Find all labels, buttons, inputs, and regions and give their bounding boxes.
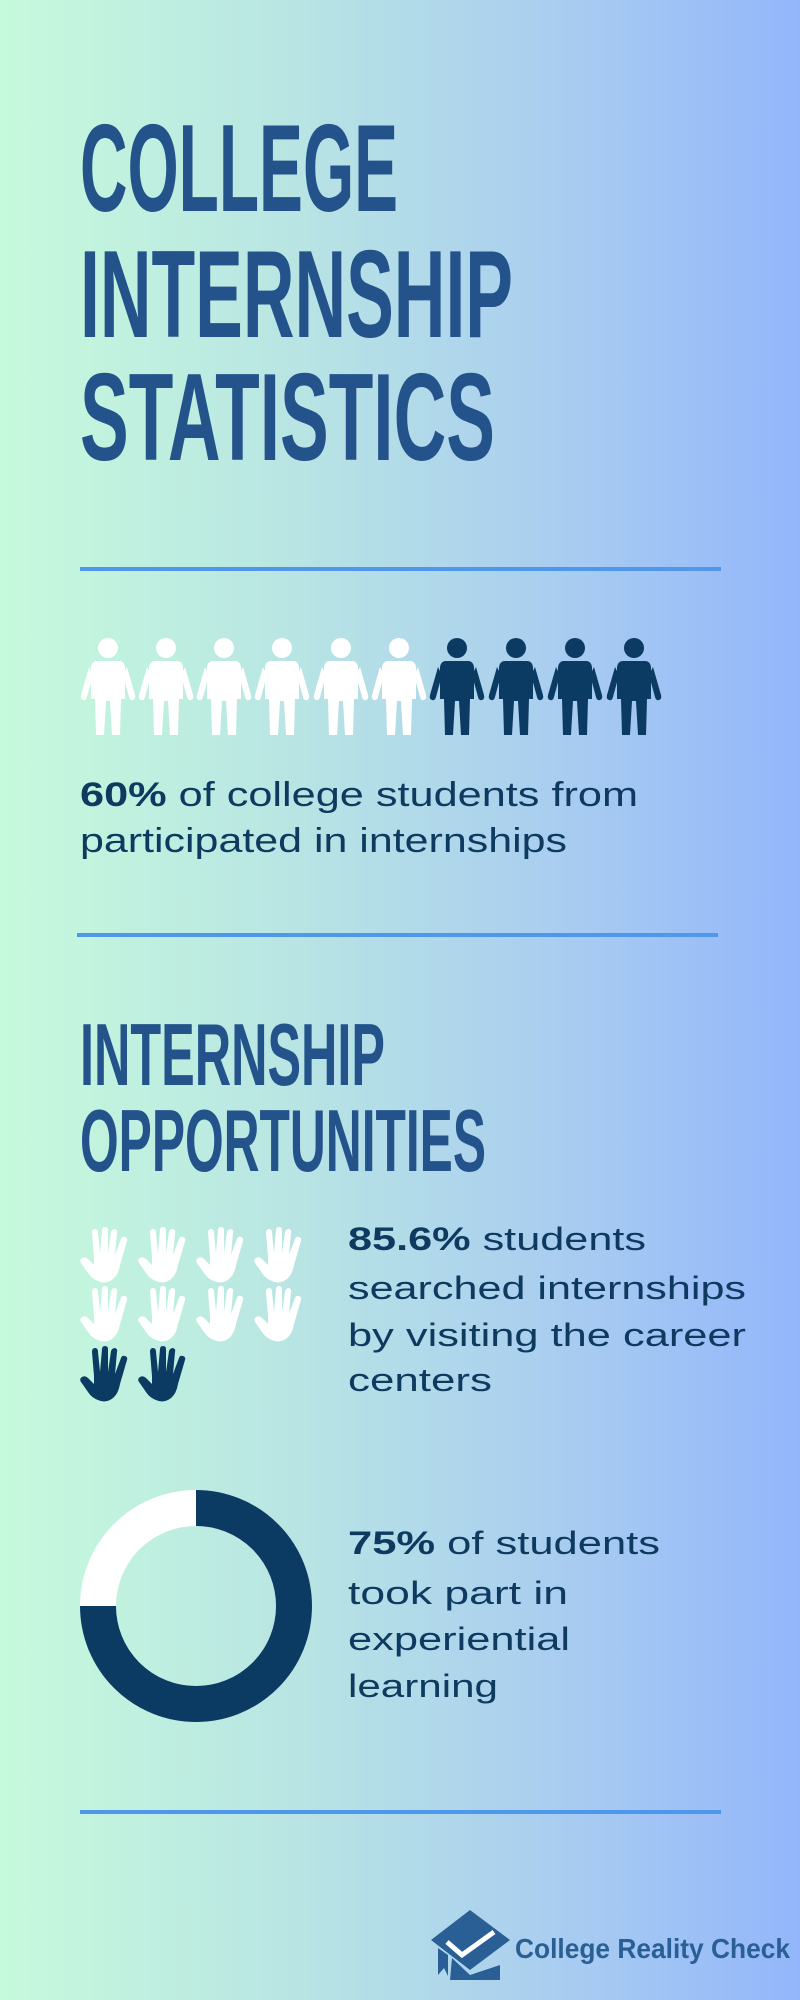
heading: internship opportunities: OPPORTUNITIES [80, 1091, 486, 1190]
stat text: 60% [80, 776, 638, 860]
stat text: 75% [348, 1525, 660, 1704]
title: COLLEGE [80, 100, 398, 238]
stat text: 75%: took part in [348, 1575, 568, 1611]
donut chart 75% [98, 1508, 294, 1704]
stat text: 85.6%: by visiting the career [348, 1317, 746, 1353]
heading: internship opportunities [80, 1005, 486, 1190]
stat text: 75%: 75% of students [348, 1525, 660, 1561]
heading: internship opportunities: INTERNSHIP [80, 1005, 385, 1104]
pictogram: 10 people, 6 white 4 dark [81, 638, 661, 735]
logo: College Reality Check [515, 1933, 790, 1964]
hands pictogram [80, 1227, 301, 1402]
stat text: 85.6% [348, 1221, 746, 1398]
stat text: 85.6%: 85.6% students [348, 1221, 646, 1257]
title [80, 100, 513, 487]
stat text: 75%: experiential [348, 1621, 570, 1657]
stat text: 85.6%: centers [348, 1362, 492, 1398]
stat text: 85.6%: searched internships [348, 1270, 746, 1306]
title: STATISTICS [80, 349, 495, 487]
stat text: 60%: participated in internships [80, 822, 567, 860]
logo [431, 1910, 790, 1980]
stat text: 75%: learning [348, 1668, 498, 1704]
stat text: 60%: 60% of college students from [80, 776, 638, 814]
